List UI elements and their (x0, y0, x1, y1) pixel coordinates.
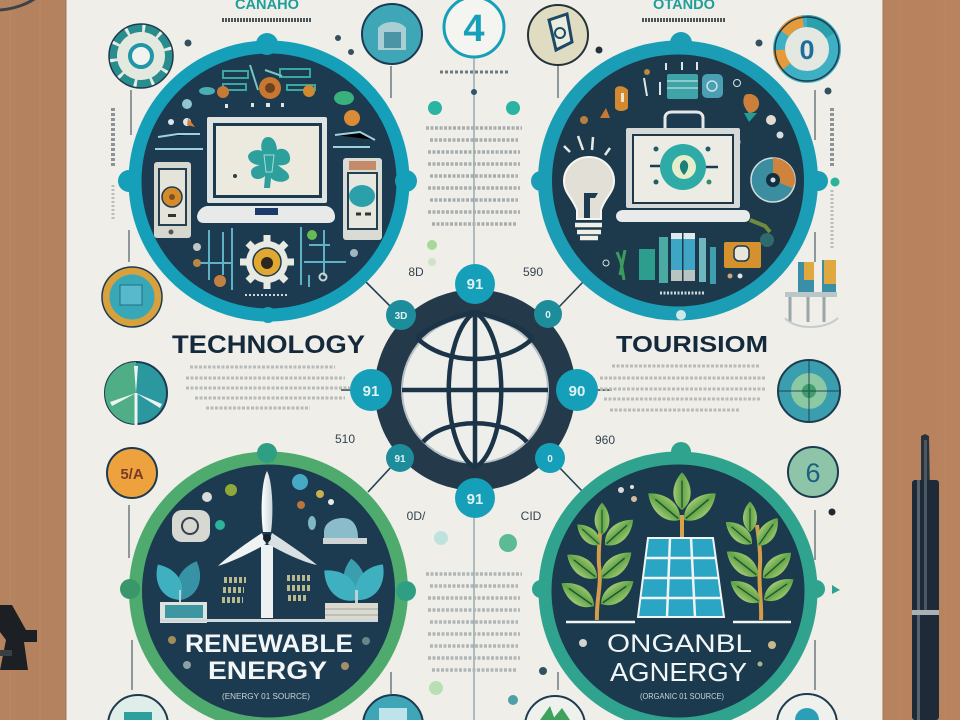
ground lines (566, 621, 791, 623)
hub node labels: 91 (467, 276, 483, 293)
number labels: 590 (523, 265, 543, 279)
heading: tourism: TOURISIOM (616, 331, 768, 357)
circle caption: (ENERGY 01 SOURCE) (222, 692, 310, 701)
number labels (335, 265, 615, 523)
heading: technology: TECHNOLOGY (172, 331, 365, 359)
book bars (603, 220, 774, 293)
center column text top (426, 58, 522, 270)
circle subtitle: ENERGY (208, 657, 327, 685)
solar panel (638, 538, 724, 617)
icon: teal badge bottom left (108, 695, 168, 720)
number labels: CID (521, 509, 542, 523)
icon: segmented badge top right: 0 (799, 35, 815, 65)
ring nodes (531, 32, 828, 320)
pie dial (751, 158, 795, 202)
globe wireframe (402, 312, 548, 468)
panel: global hub (350, 264, 598, 518)
icon cluster: upper icons (580, 62, 784, 146)
hub node labels: 91 (363, 383, 379, 400)
text block: tourism (600, 366, 765, 410)
icon: teal swirl badge bottom right (777, 694, 837, 720)
icon: archive badge (362, 4, 422, 64)
right phone (343, 158, 382, 240)
number labels: 8D (408, 265, 424, 279)
header: right caption (642, 0, 725, 20)
icon: orange badge left (102, 267, 162, 327)
left phone (154, 162, 191, 238)
icon: gear badge top left (109, 24, 173, 88)
desk object: binder clip (0, 605, 37, 670)
number labels: 0D/ (407, 509, 426, 523)
text block: technology (186, 367, 350, 408)
number labels: 960 (595, 433, 615, 447)
desk object: pen (912, 434, 939, 720)
ring nodes (120, 443, 416, 601)
circle title: RENEWABLE (185, 630, 353, 658)
laptop (197, 117, 335, 223)
number labels: 510 (335, 432, 355, 446)
left sprout and planter (149, 557, 207, 623)
circle subtitle: AGNERGY (610, 657, 747, 687)
small marks (579, 485, 776, 666)
light bulb (564, 136, 614, 238)
header: left caption (222, 0, 311, 20)
wind turbine (218, 471, 317, 618)
hub node labels: 0 (547, 454, 553, 465)
panel: organic energy circle (532, 442, 840, 720)
icon: segmented badge top right (775, 17, 839, 81)
icon: map badge top right centre (528, 5, 588, 65)
hub nodes (350, 264, 598, 518)
ring nodes (532, 442, 825, 598)
hub node labels: 91 (467, 491, 483, 508)
icon: wind turbine badge (105, 362, 167, 425)
panel: technology circle (118, 33, 417, 323)
panel: tourism circle (531, 32, 840, 320)
center column text bottom (426, 518, 522, 720)
connector lines (341, 282, 612, 492)
icon: orange badge 5/A: 5/A (120, 466, 144, 483)
hub node labels: 91 (394, 454, 406, 465)
right plant (721, 501, 798, 620)
icon cluster: upper data row (155, 65, 375, 149)
desk object: dark ring top left (0, 0, 37, 10)
ring nodes (118, 33, 417, 323)
panel: renewable energy circle (120, 443, 416, 720)
hub node labels (363, 276, 585, 508)
icon: orange badge 5/A (107, 448, 157, 498)
left plant (556, 503, 639, 620)
icon: chairs illustration (785, 260, 838, 327)
icon: world map badge right (778, 360, 840, 422)
circle title: ONGANBL (607, 630, 752, 658)
hub node labels: 0 (545, 310, 551, 321)
gear (240, 235, 294, 289)
small energy icons (168, 474, 370, 670)
icon: number 6 badge (788, 447, 838, 497)
step number 4 badge (444, 0, 504, 57)
icon: number 6 badge: 6 (805, 458, 821, 488)
circuit lines (193, 227, 358, 295)
right sprout and planter (317, 557, 392, 622)
side captions and small marks (113, 35, 836, 695)
circle caption: (ORGANIC 01 SOURCE) (640, 692, 724, 701)
icon: plant badge bottom (525, 696, 585, 720)
top plant (642, 472, 722, 537)
briefcase laptop (616, 112, 750, 222)
hub node labels: 90 (569, 383, 585, 400)
step number 4 badge: 4 (463, 8, 485, 50)
icon: teal badge bottom centre left (363, 695, 423, 720)
ground line (160, 619, 378, 622)
hub node labels: 3D (395, 311, 407, 322)
